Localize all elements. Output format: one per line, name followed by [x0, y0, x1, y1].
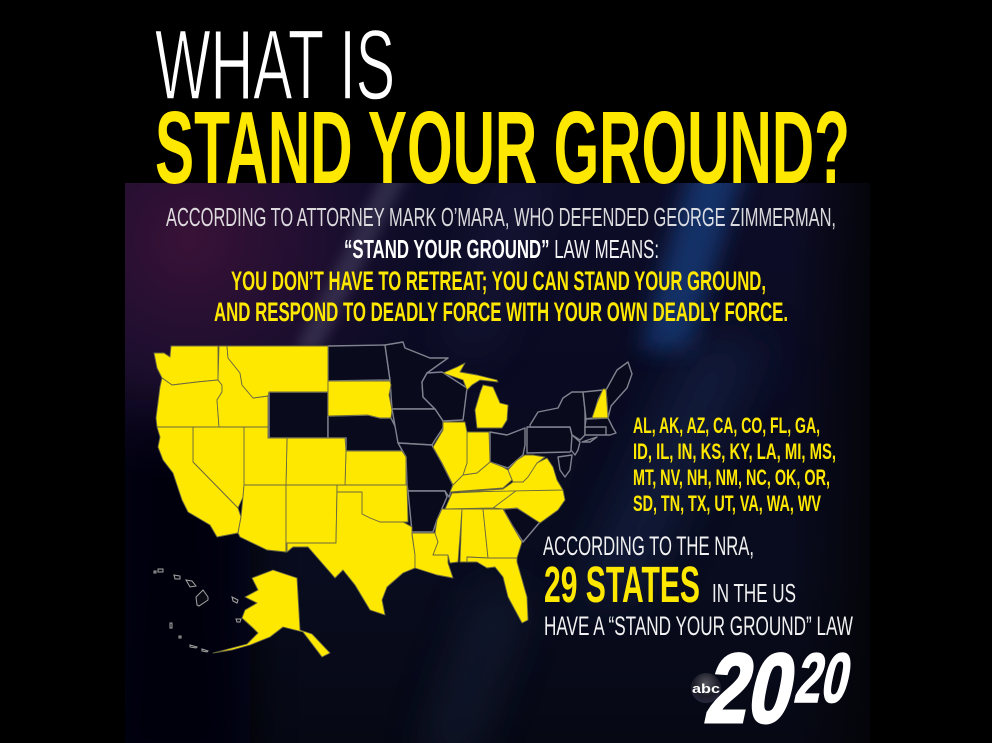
list line 3: MT, NV, NH, NM, NC, OK, OR, — [633, 465, 830, 490]
states with the law — [154, 346, 608, 657]
Hawaii and Alaskan islands — [154, 569, 241, 652]
map of the United States — [154, 342, 632, 657]
icon: abc circle — [691, 673, 721, 703]
callout: 29 states — [543, 531, 853, 641]
title line: what is: WHAT IS — [155, 9, 395, 120]
callout line 1: ACCORDING TO THE NRA, — [543, 531, 754, 561]
list line 2: ID, IL, IN, KS, KY, LA, MI, MS, — [633, 439, 836, 464]
panel: streaked background — [100, 150, 870, 743]
state abbreviations list — [633, 413, 836, 516]
callout big number: 29 STATES — [544, 556, 700, 613]
title — [155, 9, 850, 205]
list line 1: AL, AK, AZ, CA, CO, FL, GA, — [633, 413, 820, 438]
callout line 2 tail: IN THE US — [712, 578, 796, 608]
states without the law — [168, 342, 632, 542]
logo numerals large: 20 — [698, 634, 806, 743]
list line 4: SD, TN, TX, UT, VA, WA, WV — [633, 491, 821, 516]
intro line 2: “STAND YOUR GROUND” LAW MEANS: — [344, 234, 659, 264]
intro text block — [166, 202, 836, 327]
logo: abc 20/20 — [691, 634, 858, 743]
icon: abc circle: abc — [692, 681, 720, 696]
logo numerals small: 20 — [790, 639, 858, 717]
